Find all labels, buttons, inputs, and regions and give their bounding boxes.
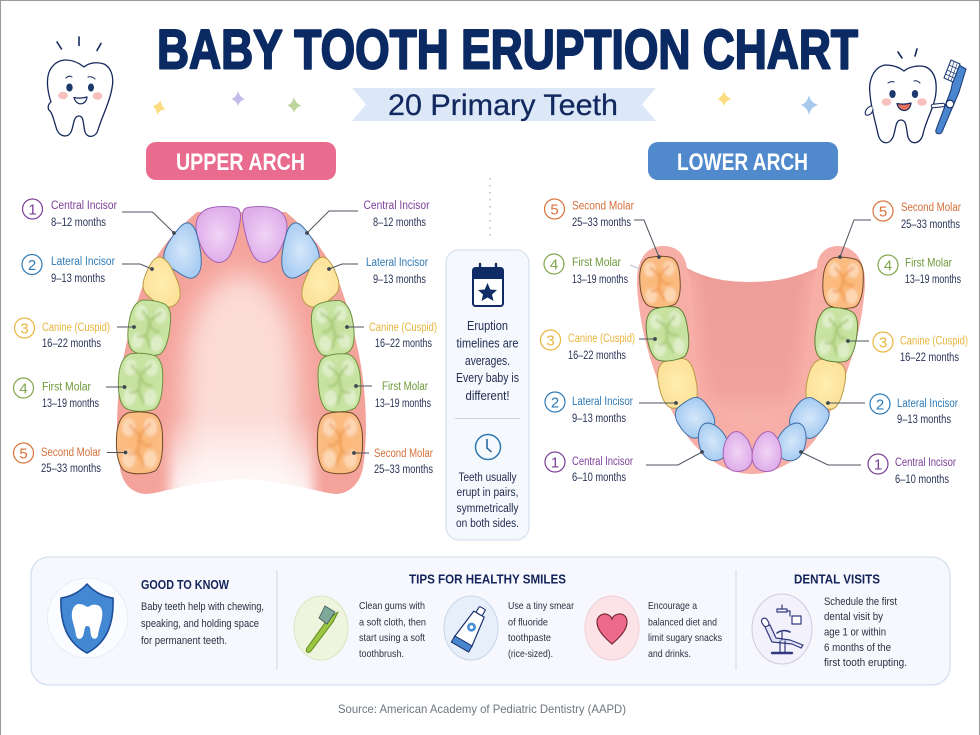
label: lower right first molar (878, 255, 961, 286)
label: lower right central incisor: Central Incisor (895, 457, 956, 469)
label: lower left central incisor (545, 452, 633, 484)
label: lower left lateral incisor (545, 392, 633, 425)
label: upper left central incisor (22, 199, 117, 229)
label: lower right first molar: 4 (884, 258, 892, 274)
panel: bottom information strip (31, 557, 950, 685)
labels: upper arch right: Lateral Incisor (366, 257, 428, 269)
labels: upper arch right: 25–33 months (374, 464, 433, 476)
label: upper left second molar (14, 443, 101, 475)
label: lower left first molar: 4 (550, 256, 558, 274)
labels: upper arch right: 16–22 months (375, 338, 432, 350)
text: clean gums: toothbrush. (359, 648, 404, 660)
labels: lower arch left (540, 199, 635, 484)
icon: happy tooth mascot left (47, 37, 113, 136)
label: lower left canine: 3 (546, 332, 555, 350)
section: dental visits (752, 572, 907, 669)
text: good to know body: speaking, and holding space (141, 618, 259, 630)
label: upper left central incisor: 8–12 months (51, 217, 106, 229)
text: dental visits body: 6 months of the (824, 642, 891, 654)
chart: lower arch illustration (637, 246, 865, 474)
icon: heart (585, 596, 639, 660)
text: good to know body: for permanent teeth. (141, 635, 227, 647)
label: lower right second molar (873, 201, 961, 231)
section: good to know (48, 577, 264, 658)
label: lower left second molar (544, 199, 634, 229)
label: lower right canine: 3 (879, 334, 887, 352)
text: erupt in pairs: symmetrically (456, 503, 519, 515)
icon: happy tooth mascot with toothbrush right (865, 49, 966, 143)
labels: upper arch right (364, 200, 437, 476)
text: dental visits body: age 1 or within (824, 626, 886, 638)
label: upper left first molar: First Molar (42, 382, 91, 394)
label: lower right canine (873, 332, 968, 364)
chart: upper arch illustration (116, 206, 366, 510)
label: upper left lateral incisor: Lateral Incisor (51, 256, 115, 268)
labels: upper arch right: First Molar (382, 381, 428, 393)
label: lower left lateral incisor: 2 (551, 394, 559, 412)
text: clean gums: Clean gums with (359, 600, 425, 612)
labels: upper arch right: Central Incisor (364, 200, 430, 212)
leader lines: upper arch (106, 211, 372, 455)
label: lower left second molar: 25–33 months (572, 217, 631, 229)
label: upper left canine (14, 318, 110, 350)
labels: upper arch right: 9–13 months (373, 274, 426, 286)
teeth: lower (639, 255, 864, 473)
text: good to know body: Baby teeth help with chewing, (141, 601, 264, 613)
label: lower left central incisor: Central Incisor (572, 456, 633, 468)
section: tips for healthy smiles (294, 572, 722, 660)
text: eruption timelines: Every baby is (456, 370, 519, 385)
section: good to know: GOOD TO KNOW (141, 577, 230, 592)
label: upper left first molar: 13–19 months (42, 398, 99, 410)
label: lower left canine: 16–22 months (568, 350, 626, 362)
text: clean gums (359, 600, 426, 660)
text: eruption timelines: Eruption (467, 318, 508, 333)
heading: upper arch: UPPER ARCH (176, 149, 305, 176)
label: upper left second molar: 25–33 months (41, 463, 101, 475)
text: balanced diet: limit sugary snacks (648, 632, 722, 644)
text: eruption timelines: different! (466, 388, 510, 403)
label: upper left first molar (14, 378, 99, 410)
teeth: upper (116, 206, 363, 474)
label: upper left canine: 16–22 months (42, 338, 101, 350)
labels: upper arch right: 8–12 months (373, 217, 426, 229)
label: upper left canine: Canine (Cuspid) (42, 322, 110, 334)
text: dental visits body (824, 596, 907, 669)
text: fluoride toothpaste: (rice-sized). (508, 648, 553, 660)
text: erupt in pairs: erupt in pairs, (456, 487, 518, 499)
label: lower right central incisor (868, 454, 956, 486)
source note: Source: American Academy of Pediatric Dentistry (AAPD) (338, 702, 626, 716)
label: lower right canine: 16–22 months (900, 352, 959, 364)
label: upper left lateral incisor: 2 (28, 257, 36, 274)
icon: toothpaste tube (444, 596, 498, 660)
text: erupt in pairs: Teeth usually (458, 472, 517, 484)
label: lower right central incisor: 1 (874, 456, 882, 474)
text: balanced diet (648, 600, 722, 660)
label: upper left lateral incisor: 9–13 months (51, 273, 105, 285)
icon: shield with tooth (61, 584, 113, 653)
heading: lower arch (648, 142, 838, 180)
text: balanced diet: balanced diet and (648, 616, 717, 628)
icon: green toothbrush (294, 596, 348, 660)
text: erupt in pairs (456, 472, 519, 530)
label: lower left canine (540, 330, 635, 362)
label: upper left lateral incisor (22, 254, 115, 285)
text: eruption timelines: averages. (465, 353, 510, 368)
label: lower right lateral incisor: 2 (876, 396, 884, 414)
label: lower right central incisor: 6–10 months (895, 474, 949, 486)
labels: lower arch right (868, 201, 968, 486)
label: lower left second molar: 5 (550, 202, 559, 218)
text: dental visits body: first tooth erupting. (824, 657, 907, 669)
text: eruption timelines (456, 318, 519, 403)
section: dental visits: DENTAL VISITS (794, 572, 880, 586)
label: upper left canine: 3 (20, 320, 29, 338)
text: eruption timelines: timelines are (456, 336, 518, 350)
text: fluoride toothpaste: toothpaste (508, 632, 551, 644)
label: lower left first molar: First Molar (572, 257, 621, 269)
leader lines: lower arch (630, 220, 871, 465)
text: fluoride toothpaste: of fluoride (508, 616, 548, 628)
label: upper left second molar: 5 (19, 446, 28, 462)
icon: toothbrush held by mascot (936, 60, 966, 134)
label: upper left first molar: 4 (19, 380, 28, 398)
labels: upper arch right: Canine (Cuspid) (369, 322, 437, 334)
text: balanced diet: and drinks. (648, 648, 691, 660)
heading: upper arch (146, 142, 336, 180)
label: lower left second molar: Second Molar (572, 200, 634, 212)
text: balanced diet: Encourage a (648, 600, 697, 612)
text: good to know body (141, 601, 264, 647)
label: lower right second molar: Second Molar (901, 202, 961, 214)
label: lower right first molar: 13–19 months (905, 274, 961, 286)
text: clean gums: a soft cloth, then (359, 616, 426, 628)
label: lower left first molar: 13–19 months (572, 274, 628, 286)
label: lower right lateral incisor (870, 394, 958, 426)
label: lower right first molar: First Molar (905, 258, 952, 270)
label: lower right second molar: 5 (879, 204, 887, 220)
labels: upper arch right: 13–19 months (375, 398, 431, 410)
labels: upper arch right: Second Molar (374, 448, 433, 460)
label: lower left central incisor: 1 (551, 454, 559, 472)
panel: eruption note (446, 250, 529, 540)
icon: sparkle stars (151, 91, 818, 116)
text: fluoride toothpaste: Use a tiny smear (508, 600, 574, 612)
label: lower right lateral incisor: Lateral Incisor (897, 398, 958, 410)
text: fluoride toothpaste (508, 600, 574, 660)
label: lower left central incisor: 6–10 months (572, 472, 626, 484)
text: dental visits body: dental visit by (824, 611, 883, 623)
text: erupt in pairs: on both sides. (456, 518, 519, 530)
label: lower left lateral incisor: 9–13 months (572, 413, 626, 425)
dotted divider (489, 178, 491, 240)
text: clean gums: start using a soft (359, 632, 425, 644)
icon: clock (476, 434, 500, 460)
label: lower left lateral incisor: Lateral Incisor (572, 396, 633, 408)
subtitle ribbon: 20 Primary Teeth (388, 89, 618, 122)
label: lower right second molar: 25–33 months (901, 219, 960, 231)
label: upper left second molar: Second Molar (41, 447, 101, 459)
label: upper left central incisor: 1 (28, 202, 37, 218)
labels: upper arch left (14, 199, 117, 475)
icon: dental chair (752, 594, 812, 664)
icon: calendar with star (473, 264, 503, 306)
label: lower left first molar (544, 254, 628, 286)
label: lower left canine: Canine (Cuspid) (568, 333, 635, 345)
heading: lower arch: LOWER ARCH (677, 149, 808, 176)
label: upper left central incisor: Central Incisor (51, 200, 117, 212)
label: lower right lateral incisor: 9–13 months (897, 414, 951, 426)
text: dental visits body: Schedule the first (824, 596, 897, 608)
section: tips for healthy smiles: TIPS FOR HEALTHY SMILES (409, 572, 566, 586)
